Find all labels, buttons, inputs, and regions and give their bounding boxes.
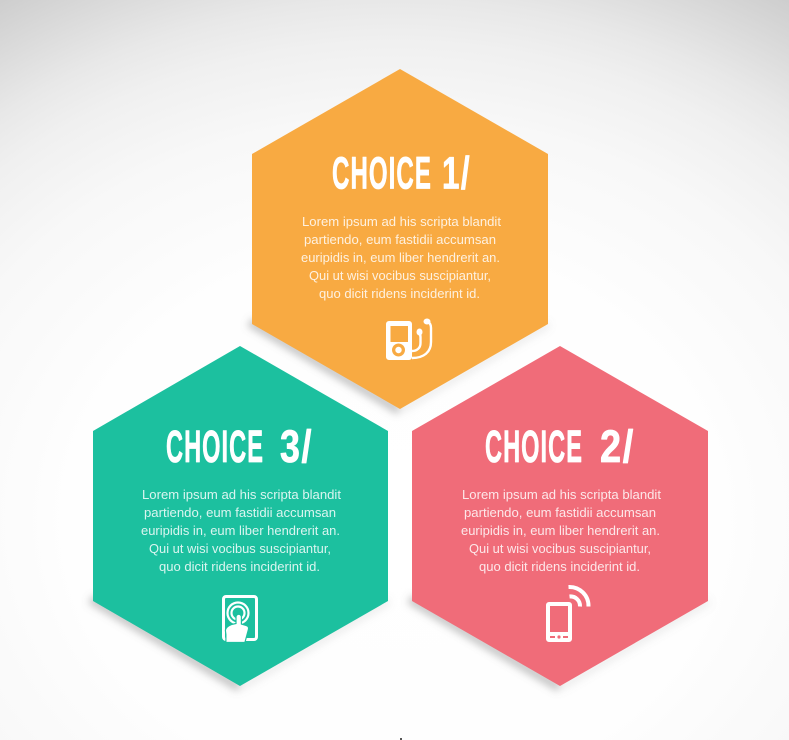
text block: choice 3: Qui ut wisi vocibus suscipiantur, [149,542,331,556]
text block: choice 1: euripidis in, eum liber hendrerit an. [301,251,500,265]
text block: choice 2: partiendo, eum fastidii accumsan [464,506,656,520]
text block: choice 3: euripidis in, eum liber hendrerit an. [141,524,340,538]
text block: choice 3: quo dicit ridens inciderint id. [159,560,320,574]
text block: choice 3: Lorem ipsum ad his scripta blandit [142,488,342,502]
text block: choice 1: Qui ut wisi vocibus suscipiantur, [309,269,491,283]
text block: choice 1: partiendo, eum fastidii accumsan [304,233,496,247]
icon: smartphone with signal [546,587,589,642]
panel: choice 3 [88,346,390,692]
icon: music player with earphones [386,318,431,360]
heading: choice 2: 2/ [600,421,635,472]
text block: choice 1: quo dicit ridens inciderint id. [319,287,480,301]
text block: choice 1 [301,215,502,301]
text block: choice 2: Lorem ipsum ad his scripta blandit [462,488,662,502]
text block: choice 3 [141,488,342,574]
text block: choice 2 [461,488,662,574]
text block: choice 2: euripidis in, eum liber hendrerit an. [461,524,660,538]
text block: choice 2: Qui ut wisi vocibus suscipiantur, [469,542,651,556]
icon: hand touching tablet [224,596,256,642]
heading: choice 1: CHOICE [332,148,432,198]
hexagon: choice 2 [412,346,708,686]
hexagon: choice 3 [93,346,388,686]
bottom speck [400,738,402,740]
text block: choice 1: Lorem ipsum ad his scripta blandit [302,215,502,229]
text block: choice 2: quo dicit ridens inciderint id. [479,560,640,574]
text block: choice 3: partiendo, eum fastidii accumsan [144,506,336,520]
hexagon shadow: choice 1 [247,318,550,415]
heading: choice 3: 3/ [280,421,313,472]
heading: choice 1: 1/ [442,148,471,198]
hexagon shadow: choice 2 [407,595,710,692]
panel: choice 2 [407,346,710,692]
heading: choice 3: CHOICE [166,421,264,472]
hexagon shadow: choice 3 [88,595,390,692]
hexagon: choice 1 [252,69,548,409]
heading: choice 2: CHOICE [485,421,583,472]
panel: choice 1 [247,69,550,415]
